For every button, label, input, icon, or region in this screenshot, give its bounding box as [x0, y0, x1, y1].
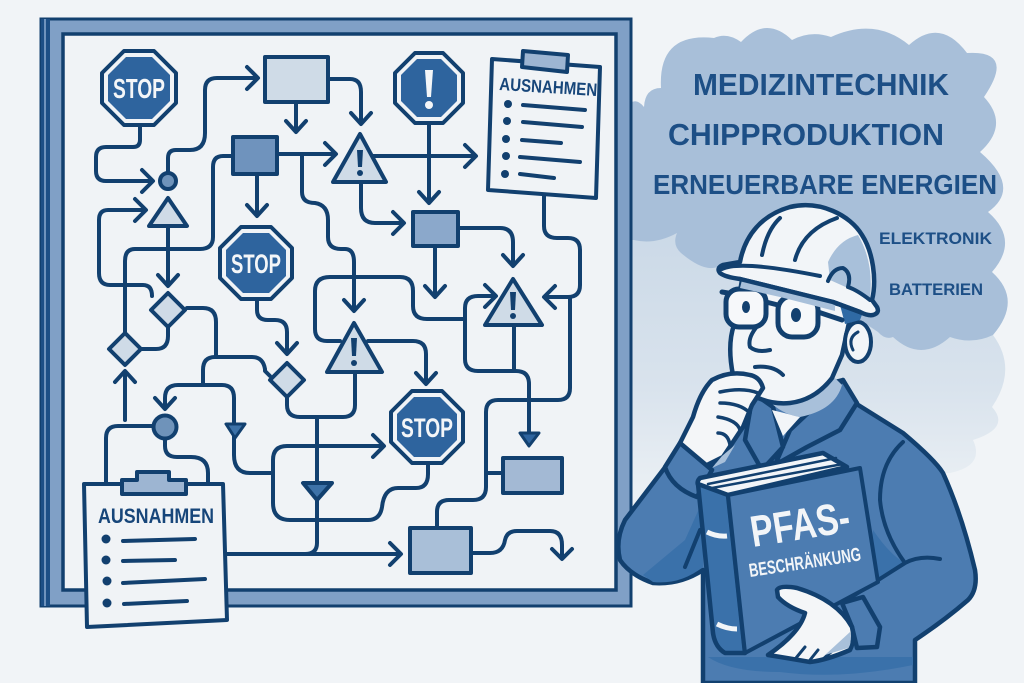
- label: Chipproduktion: CHIPPRODUKTION: [668, 117, 944, 152]
- right cuff: [842, 597, 880, 648]
- clipboard: Ausnahmen, top right: [488, 51, 600, 198]
- process box, dark: [233, 137, 277, 174]
- hair: [840, 305, 863, 324]
- stop sign, top left: STOP: [113, 73, 165, 104]
- arrowheads: [115, 67, 572, 565]
- clothing shadows: [643, 500, 913, 675]
- warning triangle, right: [485, 279, 542, 325]
- open shirt collar: [745, 380, 857, 470]
- thought cloud: [630, 28, 1008, 350]
- stop sign, centre: STOP: [231, 249, 281, 279]
- flow marker triangle, right: [520, 433, 539, 446]
- flowchart connector lines: [96, 78, 580, 558]
- ear detail: [851, 332, 858, 350]
- left cuff: [665, 443, 712, 497]
- junction circle, lower: [154, 416, 176, 438]
- process box, lower right: [503, 458, 562, 493]
- label: Erneuerbare Energien: ERNEUERBARE ENERGIEN: [653, 169, 997, 200]
- label: Elektronik: ELEKTRONIK: [879, 229, 993, 248]
- board frame: [41, 19, 631, 606]
- clipboard: Ausnahmen, bottom left: AUSNAHMEN: [98, 505, 214, 528]
- glasses: [722, 289, 842, 337]
- warning triangle, top: [333, 134, 386, 182]
- ear: [845, 322, 871, 362]
- label: Medizintechnik: MEDIZINTECHNIK: [693, 67, 950, 102]
- junction circle, upper: [160, 173, 176, 189]
- pale haze behind the worker: [630, 230, 1005, 520]
- warning octagon with exclamation mark: [395, 53, 463, 123]
- process box, bottom: [410, 528, 471, 573]
- decision diamond, centre: [270, 363, 304, 397]
- cloud text: application areas: [653, 67, 997, 299]
- clipboard: Ausnahmen, top right: AUSNAHMEN: [499, 74, 598, 100]
- decision diamond, left: [109, 333, 141, 365]
- decision diamond, upper: [151, 293, 185, 327]
- hard hat: [719, 205, 878, 315]
- label: Batterien: BATTERIEN: [889, 280, 983, 299]
- hand on chin: [680, 373, 763, 468]
- neck shadow: [772, 375, 842, 417]
- clipboard: Ausnahmen, bottom left: [84, 472, 227, 627]
- stop sign, lower right: STOP: [401, 413, 453, 443]
- book: PFAS-Beschränkung: BESCHRÄNKUNG: [748, 544, 862, 582]
- nose: [749, 323, 770, 351]
- warning triangle, centre: [327, 323, 382, 372]
- stop sign, top left: [102, 51, 176, 125]
- stop sign, centre: [220, 227, 292, 299]
- book: PFAS-Beschränkung: PFAS-: [747, 493, 853, 557]
- torso and arms: [618, 380, 976, 683]
- hand holding book: [768, 587, 853, 662]
- flow marker triangle, left: [226, 424, 245, 438]
- worker figure: [618, 205, 976, 683]
- process box, middle right: [413, 212, 458, 246]
- stop sign, lower right: [391, 391, 463, 463]
- process box, top: [265, 57, 328, 102]
- book: PFAS-Beschränkung: [698, 453, 878, 653]
- face: [730, 280, 850, 403]
- mouth: [755, 367, 783, 375]
- flow marker triangle, bottom: [303, 483, 332, 500]
- triangle node: [149, 198, 187, 226]
- sleeve seam lines: [665, 442, 940, 603]
- shirt neck opening: [772, 410, 800, 436]
